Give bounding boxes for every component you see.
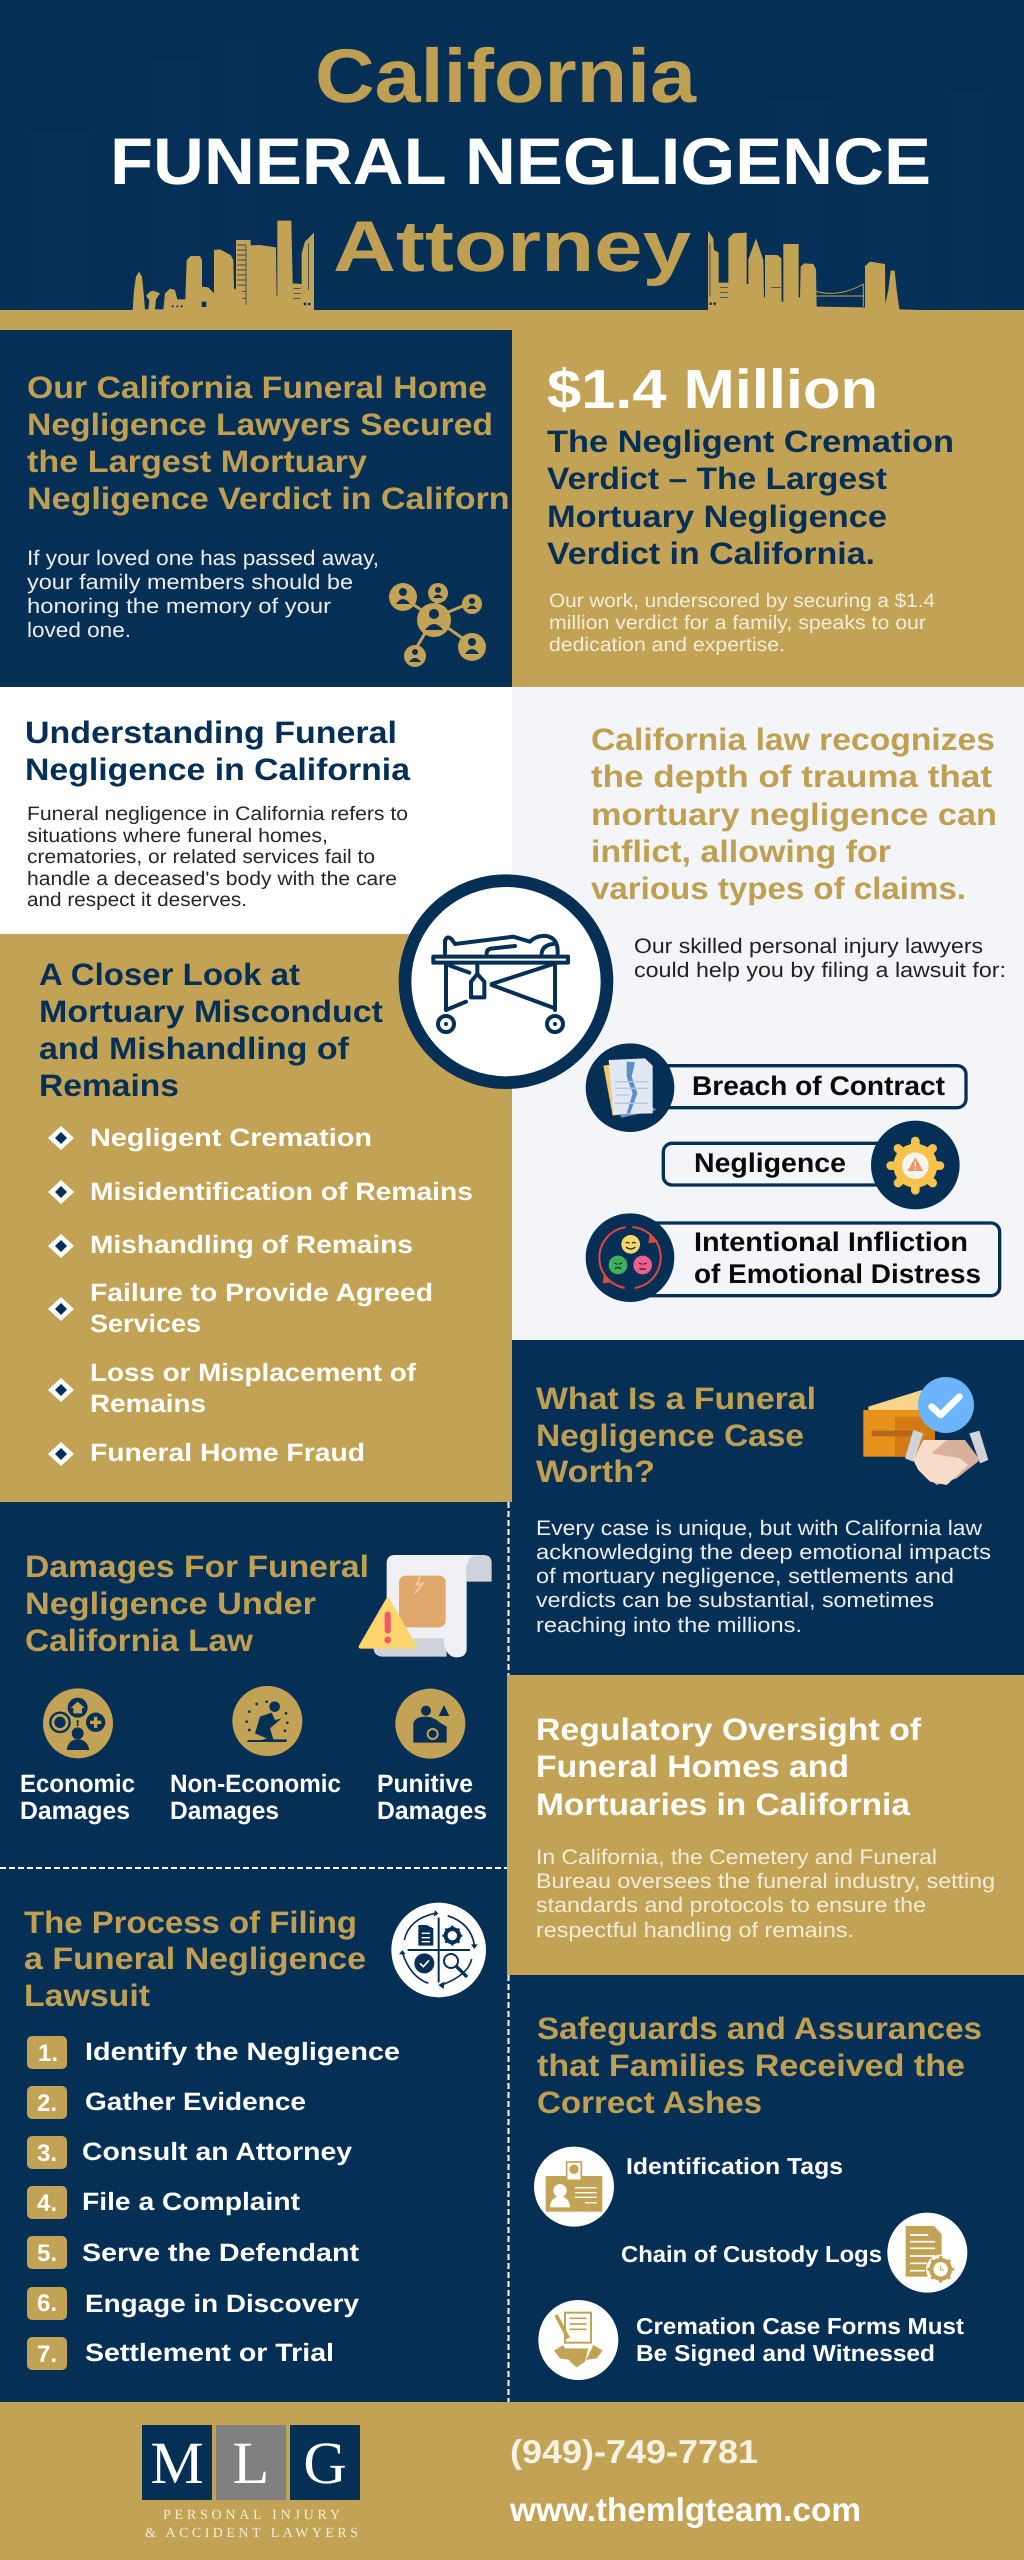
heading: verdict intro: the Largest Mortuary (27, 444, 368, 479)
panel: header (0, 0, 1024, 312)
text: every case: acknowledging the deep emotional impacts (536, 1541, 991, 1564)
heading: closer look: Remains (39, 1068, 179, 1103)
list: misconduct types: Services (90, 1310, 201, 1338)
list: process steps: 5. (37, 2240, 57, 2267)
logo: MLG: L (233, 2430, 269, 2496)
list: process steps (27, 2036, 400, 2370)
list: process steps: Consult an Attorney (82, 2138, 352, 2166)
title: California: California (315, 34, 697, 119)
safeguard: identification tags: Identification Tags (626, 2153, 843, 2179)
heading: verdict intro: Negligence Lawyers Secured (27, 407, 493, 442)
claim: negligence (663, 1121, 960, 1209)
list: misconduct types: Failure to Provide Agreed (90, 1279, 433, 1307)
icon: process cycle (391, 1903, 486, 1997)
heading: california law recognizes (591, 722, 997, 906)
heading: negligent cremation verdict: Verdict – The Largest (547, 461, 887, 496)
claim: breach of contract: Breach of Contract (692, 1071, 945, 1101)
text: cemetery and funeral bureau: respectful handling of remains. (536, 1919, 854, 1942)
logo: MLG: PERSONAL INJURY (163, 2508, 340, 2523)
icon: people network (389, 583, 486, 667)
heading: negligent cremation verdict (547, 424, 954, 571)
heading: safeguards (537, 2011, 982, 2120)
text: cemetery and funeral bureau: In California, the Cemetery and Funeral (536, 1846, 937, 1869)
heading: safeguards: Safeguards and Assurances (537, 2011, 982, 2046)
panel: $1.4 million (512, 330, 1024, 687)
icon: gurney in circle (405, 881, 607, 1083)
text: every case: verdicts can be substantial, sometimes (536, 1589, 934, 1612)
heading: case worth (536, 1381, 816, 1489)
logo: MLG (142, 2425, 360, 2541)
text: definition: situations where funeral homes, (27, 825, 328, 847)
text: definition: handle a deceased's body with the care (27, 868, 397, 890)
logo: MLG: G (303, 2430, 347, 2496)
heading: california law recognizes: inflict, allowing for (591, 834, 891, 869)
claim: intentional infliction: of Emotional Distress (694, 1259, 981, 1289)
text: skilled lawyers: could help you by filing a lawsuit for: (634, 959, 1006, 982)
heading: safeguards: that Families Received the (537, 2048, 965, 2083)
heading: process (24, 1905, 366, 2013)
list: process steps: File a Complaint (82, 2188, 301, 2216)
heading: safeguards: Correct Ashes (537, 2085, 762, 2120)
text: our work (549, 590, 935, 656)
text: cemetery and funeral bureau (536, 1846, 995, 1942)
text: loved one: honoring the memory of your (27, 595, 331, 618)
text: every case: Every case is unique, but with California law (536, 1517, 983, 1540)
text: loved one: your family members should be (27, 571, 353, 594)
heading: understanding: Negligence in California (25, 752, 411, 787)
list: process steps: Identify the Negligence (85, 2038, 400, 2066)
heading: regulatory: Funeral Homes and (536, 1749, 849, 1784)
safeguard: cremation case forms: Be Signed and Witnessed (636, 2340, 935, 2366)
heading: negligent cremation verdict: Verdict in California. (547, 536, 875, 571)
panel: claims (512, 687, 1024, 1340)
skyline: left (120, 221, 314, 312)
panel: safeguards (507, 1975, 1024, 2402)
heading: california law recognizes: California law recognizes (591, 722, 995, 757)
heading: closer look: A Closer Look at (39, 957, 300, 992)
damages: non-economic: Damages (170, 1797, 279, 1825)
heading: damages (25, 1549, 369, 1658)
text: every case: reaching into the millions. (536, 1614, 802, 1637)
heading: verdict intro: Negligence Verdict in California (27, 481, 539, 516)
text: definition: crematories, or related services fail to (27, 846, 375, 868)
heading: negligent cremation verdict: The Negligent Cremation (547, 424, 954, 459)
safeguard: chain of custody logs: Chain of Custody Logs (621, 2241, 882, 2267)
damages: economic: Economic (20, 1770, 135, 1798)
list: process steps: Serve the Defendant (82, 2239, 360, 2267)
contact: website: www.themlgteam.com (509, 2491, 861, 2528)
list: misconduct types: Loss or Misplacement of (90, 1359, 417, 1387)
heading: negligent cremation verdict: Mortuary Negligence (547, 499, 887, 534)
heading: case worth: What Is a Funeral (536, 1381, 816, 1416)
list: misconduct types: Misidentification of Remains (90, 1178, 473, 1206)
claim: negligence: Negligence (694, 1148, 846, 1178)
icon: scroll with warning (361, 1555, 492, 1657)
contact: phone: (949)-749-7781 (510, 2433, 758, 2470)
text: our work: million verdict for a family, speaks to our (549, 612, 927, 634)
panel: footer (0, 2402, 1024, 2560)
safeguard: cremation case forms: Cremation Case Forms Must (636, 2313, 964, 2339)
list: process steps: 4. (37, 2190, 57, 2217)
text: every case: of mortuary negligence, settlements and (536, 1565, 954, 1588)
text: loved one (27, 547, 379, 642)
logo: MLG: & ACCIDENT LAWYERS (145, 2526, 358, 2541)
panel: understanding funeral negligence (0, 687, 512, 934)
heading: understanding (25, 715, 411, 787)
panel: closer look (0, 934, 512, 1502)
safeguard: cremation case forms (538, 2300, 964, 2380)
text: definition: Funeral negligence in California refers to (27, 803, 408, 825)
heading: california law recognizes: the depth of trauma that (591, 759, 992, 794)
list: misconduct types: Remains (90, 1390, 206, 1418)
list: process steps: Settlement or Trial (85, 2339, 334, 2367)
damages: economic (20, 1688, 135, 1825)
text: skilled lawyers: Our skilled personal injury lawyers (634, 935, 983, 958)
text: every case (536, 1517, 991, 1637)
list: misconduct types: Negligent Cremation (90, 1124, 372, 1152)
damages: punitive (377, 1689, 487, 1825)
list: process steps: 1. (38, 2040, 58, 2067)
list: process steps: 2. (37, 2090, 57, 2117)
icon: folder and handshake (863, 1377, 988, 1485)
heading: regulatory: Mortuaries in California (536, 1787, 911, 1822)
text: loved one: loved one. (27, 619, 131, 642)
stat: $1.4 Million: $1.4 Million (547, 358, 878, 420)
list: misconduct types: Mishandling of Remains (90, 1231, 413, 1259)
heading: verdict intro (27, 370, 539, 516)
logo: MLG: M (150, 2430, 204, 2496)
gold band (0, 310, 1024, 330)
panel: regulatory oversight (507, 1675, 1024, 1975)
heading: california law recognizes: various types of claims. (591, 871, 966, 906)
damages: economic: Damages (20, 1797, 130, 1825)
text: definition (27, 803, 408, 911)
process heading and icon (24, 1903, 486, 2013)
panel: case worth (512, 1340, 1024, 1675)
safeguard: identification tags (534, 2147, 843, 2227)
text: our work: dedication and expertise. (549, 634, 785, 656)
text: cemetery and funeral bureau: Bureau oversees the funeral industry, setting (536, 1870, 995, 1893)
panel: verdict intro (0, 330, 539, 687)
list: process steps: Gather Evidence (85, 2088, 306, 2116)
heading: case worth: Negligence Case (536, 1418, 804, 1453)
heading: process: Lawsuit (24, 1978, 150, 2013)
skyline: right (708, 231, 920, 312)
text: skilled lawyers (634, 935, 1006, 982)
list: process steps: Engage in Discovery (85, 2290, 359, 2318)
title: Funeral Negligence: FUNERAL NEGLIGENCE (110, 124, 931, 198)
text: cemetery and funeral bureau: standards and protocols to ensure the (536, 1894, 926, 1917)
text: our work: Our work, underscored by securing a $1.4 (549, 590, 935, 612)
damages: non-economic (170, 1686, 341, 1825)
list: process steps: 6. (37, 2290, 57, 2317)
heading: closer look (39, 957, 383, 1103)
damages: non-economic: Non-Economic (170, 1770, 341, 1798)
list: process steps: 3. (37, 2140, 57, 2167)
heading: process: The Process of Filing (24, 1905, 357, 1940)
text: loved one: If your loved one has passed away, (27, 547, 379, 570)
heading: process: a Funeral Negligence (24, 1941, 366, 1976)
text: definition: and respect it deserves. (27, 889, 247, 911)
list: misconduct types (48, 1124, 473, 1467)
heading: verdict intro: Our California Funeral Home (27, 370, 487, 405)
claim: intentional infliction: Intentional Infliction (694, 1227, 968, 1257)
heading: understanding: Understanding Funeral (25, 715, 397, 750)
heading: regulatory (536, 1712, 922, 1822)
heading: damages: Negligence Under (25, 1586, 316, 1621)
heading: damages: California Law (25, 1623, 254, 1658)
heading: damages: Damages For Funeral (25, 1549, 369, 1584)
claim: breach of contract (586, 1043, 966, 1132)
damages: punitive: Punitive (377, 1770, 473, 1798)
claim: intentional infliction (586, 1213, 1000, 1302)
heading: closer look: Mortuary Misconduct (39, 994, 383, 1029)
safeguard: chain of custody logs (621, 2213, 967, 2293)
list: misconduct types: Funeral Home Fraud (90, 1439, 365, 1467)
heading: regulatory: Regulatory Oversight of (536, 1712, 922, 1747)
damages: punitive: Damages (377, 1797, 487, 1825)
list: process steps: 7. (37, 2341, 57, 2368)
heading: case worth: Worth? (536, 1454, 655, 1489)
heading: closer look: and Mishandling of (39, 1031, 350, 1066)
heading: california law recognizes: mortuary negligence can (591, 797, 997, 832)
title: Attorney: Attorney (333, 207, 691, 287)
panel: damages (0, 1502, 507, 2402)
